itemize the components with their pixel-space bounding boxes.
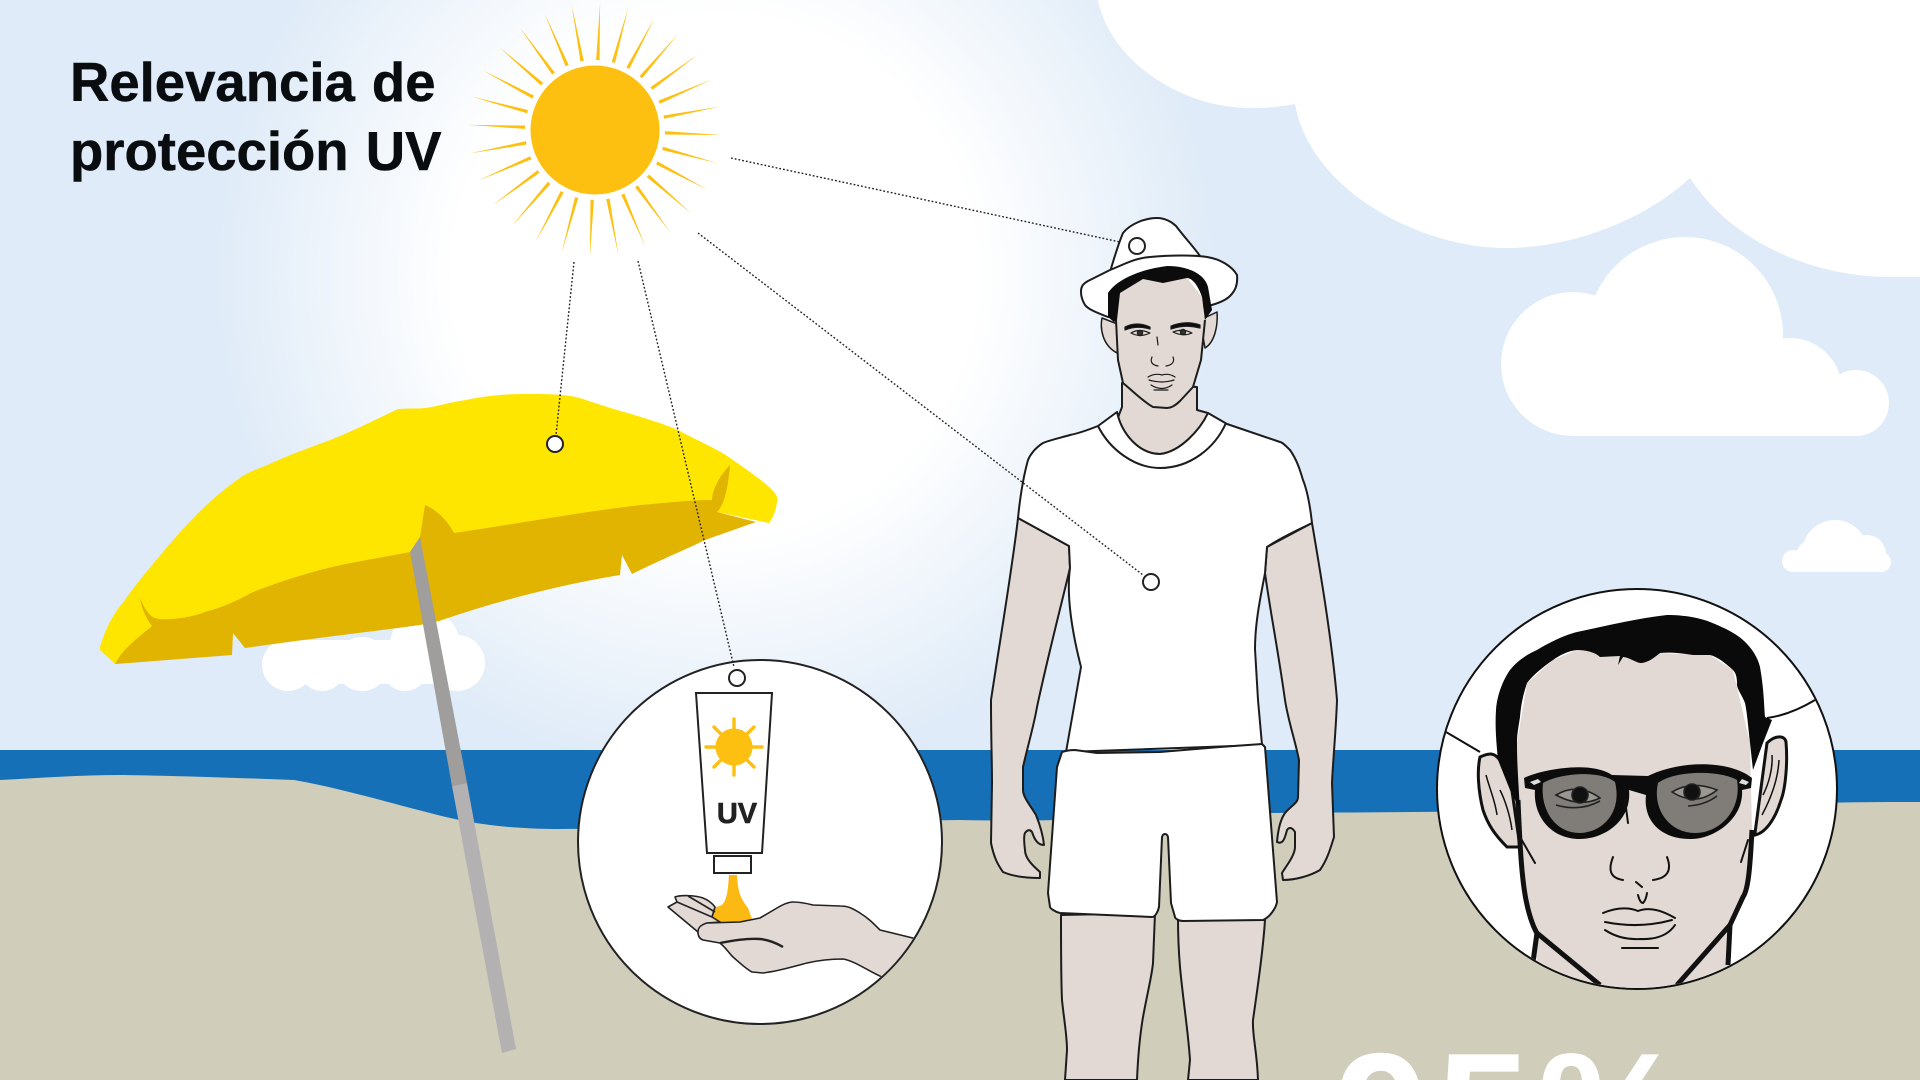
small cloud [1782, 520, 1891, 572]
left arm [991, 518, 1070, 878]
large cloud [1098, 0, 1920, 277]
marker: sunscreen [729, 670, 745, 686]
man figure [991, 218, 1337, 1080]
umbrella canopy top [100, 394, 778, 664]
sunscreen tube [696, 693, 772, 873]
sunglasses face circle [1437, 589, 1837, 990]
sea [0, 750, 1920, 850]
eyes behind lenses [1556, 784, 1717, 808]
sand [0, 775, 1920, 1080]
sunscreen gel [712, 875, 753, 924]
right arm [1265, 523, 1337, 880]
head face [1116, 278, 1205, 408]
umbrella pole lower [452, 783, 516, 1053]
marker: t-shirt [1143, 574, 1159, 590]
sun disc [530, 66, 660, 194]
zoomed face [1446, 615, 1815, 990]
hair [1496, 615, 1772, 810]
dotted connector lines [556, 158, 1143, 667]
right leg [1178, 918, 1265, 1080]
t-shirt collar [1098, 423, 1226, 468]
ear inner lines [1486, 755, 1779, 830]
face skin [1517, 650, 1752, 990]
hand [667, 894, 914, 977]
sunglasses [1524, 764, 1752, 839]
ears [1101, 312, 1217, 353]
nose and mouth [1520, 800, 1748, 948]
marker: umbrella [547, 436, 563, 452]
jaw line [1116, 320, 1205, 408]
man face details [1125, 323, 1200, 390]
circle background [1437, 589, 1837, 989]
shorts [1048, 744, 1277, 921]
jaw and neck lines [1518, 800, 1752, 985]
ears [1478, 737, 1787, 847]
sky with sun glow [0, 0, 1920, 760]
tube label: UV [717, 798, 758, 830]
beach umbrella [100, 394, 778, 1053]
hat brim lines [1446, 700, 1815, 752]
neck [1117, 383, 1208, 454]
sun icon [468, 3, 722, 257]
t-shirt [1018, 412, 1312, 752]
medium cloud [1501, 237, 1889, 442]
sun rays [468, 3, 722, 257]
sunscreen circle [578, 660, 942, 1024]
title: Relevancia de [70, 52, 436, 113]
title: protección UV [70, 121, 441, 182]
umbrella underside [115, 465, 756, 664]
tube sun icon [706, 719, 762, 775]
marker: hat [1129, 238, 1145, 254]
circle background [578, 660, 942, 1024]
umbrella pole upper [410, 537, 467, 786]
left leg [1061, 913, 1155, 1080]
man hair [1108, 266, 1212, 322]
cloud behind umbrella [262, 610, 485, 691]
hat [1081, 218, 1237, 317]
